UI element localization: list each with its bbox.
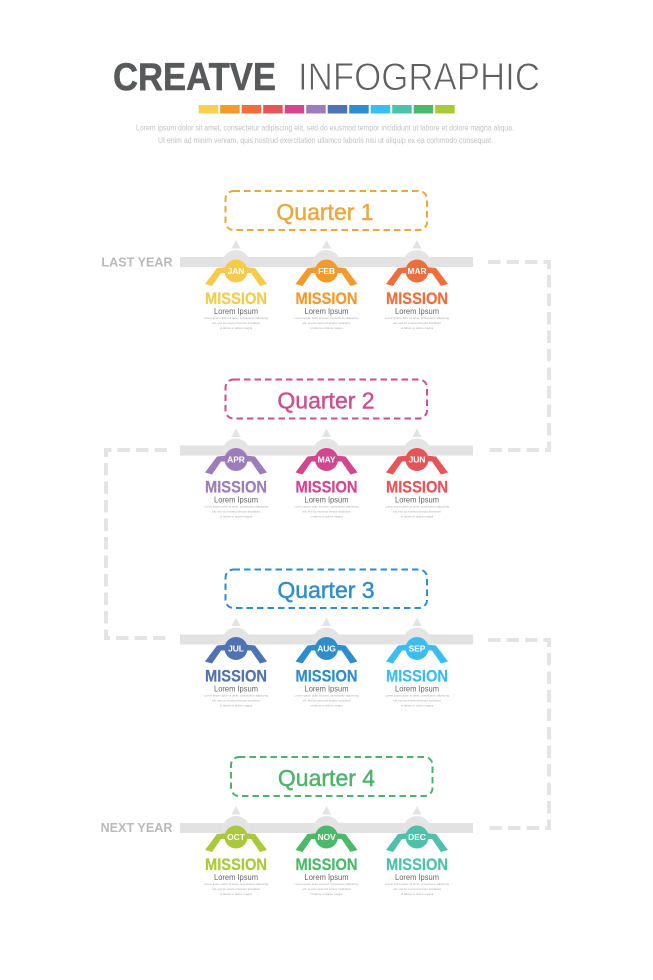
label: last year: LAST YEAR <box>101 256 173 270</box>
month: july: Lorem Ipsum <box>214 684 258 694</box>
intro text: Ut enim ad minim veniam, quis nostrud exercitation ullamco laboris nisi ut aliquip ex ea commodo consequat. <box>158 136 493 145</box>
timeline bar <box>180 634 473 644</box>
month: november: ut labore et dolore magna <box>310 892 343 896</box>
month: september: Lorem ipsum dolor sit amet, consectetur adipiscing <box>385 694 449 698</box>
month: february: elit, sed do eiusmod tempor incididunt <box>303 321 351 325</box>
month: december: MISSION <box>386 856 448 874</box>
panel: quarter 3 <box>180 570 473 708</box>
quarter 3 heading <box>226 570 427 608</box>
month: july: JUL <box>228 644 244 654</box>
month: december: ut labore et dolore magna <box>401 892 434 896</box>
month: january: Lorem ipsum dolor sit amet, consectetur adipiscing <box>204 316 268 320</box>
title: INFOGRAPHIC <box>298 56 540 99</box>
title: CREATVE <box>113 56 276 99</box>
month: november: Lorem ipsum dolor sit amet, consectetur adipiscing <box>294 882 359 886</box>
month: may: MAY <box>318 454 336 464</box>
month: may <box>294 428 359 518</box>
month: april: MISSION <box>205 478 267 496</box>
month: march: Lorem ipsum dolor sit amet, consectetur adipiscing <box>385 316 449 320</box>
quarter 2 heading: Quarter 2 <box>277 388 375 414</box>
month: august: elit, sed do eiusmod tempor incididunt <box>303 698 351 702</box>
month: october: elit, sed do eiusmod tempor incididunt <box>212 887 260 891</box>
month: september: MISSION <box>386 667 448 685</box>
month: october: OCT <box>227 832 246 842</box>
month: january: MISSION <box>205 290 267 308</box>
month: june: Lorem ipsum dolor sit amet, consectetur adipiscing <box>385 504 449 508</box>
month: october: ut labore et dolore magna <box>220 892 253 896</box>
month: april <box>204 428 268 518</box>
intro text: Lorem ipsum dolor sit amet, consectetur adipiscing elit, sed do eiusmod tempor incididunt ut labore et dolore magna aliqua. <box>136 124 514 132</box>
quarter 4 heading <box>231 757 432 796</box>
title <box>113 56 540 99</box>
month: september <box>385 618 449 708</box>
timeline bar <box>180 823 473 833</box>
month: may: Lorem Ipsum <box>304 494 348 504</box>
month: june: JUN <box>409 454 425 464</box>
month: april: Lorem Ipsum <box>214 494 258 504</box>
month: february <box>294 240 359 330</box>
month: july: Lorem ipsum dolor sit amet, consectetur adipiscing <box>204 694 268 698</box>
connector: left, quarter 2 to quarter 3 <box>106 450 167 638</box>
panel: quarter 1 <box>180 191 473 330</box>
month: november: Lorem Ipsum <box>304 872 348 882</box>
quarter 1 heading <box>226 191 427 230</box>
month: september: ut labore et dolore magna <box>401 704 434 708</box>
month: june: MISSION <box>386 478 448 496</box>
month: may: elit, sed do eiusmod tempor incididunt <box>303 510 351 514</box>
month: january: elit, sed do eiusmod tempor incididunt <box>212 321 260 325</box>
intro text <box>136 124 514 145</box>
month: april: Lorem ipsum dolor sit amet, consectetur adipiscing <box>204 504 268 508</box>
month: march: MAR <box>407 266 427 276</box>
month: march: Lorem Ipsum <box>395 306 439 316</box>
quarter 1 heading: Quarter 1 <box>276 199 374 225</box>
month: may: MISSION <box>296 478 358 496</box>
month: may: ut labore et dolore magna <box>310 514 343 518</box>
month: june <box>385 428 449 518</box>
month: february: Lorem ipsum dolor sit amet, consectetur adipiscing <box>294 316 359 320</box>
month: september: Lorem Ipsum <box>395 684 439 694</box>
month: august <box>294 618 359 708</box>
month: april: ut labore et dolore magna <box>220 514 253 518</box>
month: june: ut labore et dolore magna <box>401 514 434 518</box>
month: january: JAN <box>228 266 244 276</box>
month: july <box>204 618 268 708</box>
month: january: ut labore et dolore magna <box>220 326 253 330</box>
color strip <box>199 105 455 114</box>
month: december <box>385 806 449 896</box>
connector: right, last year to quarter 2 <box>488 262 549 450</box>
month: october: Lorem Ipsum <box>214 872 258 882</box>
month: march <box>385 240 449 330</box>
month: april: APR <box>227 454 245 464</box>
month: may: Lorem ipsum dolor sit amet, consectetur adipiscing <box>294 504 359 508</box>
panel: quarter 4 <box>180 757 473 896</box>
month: march: MISSION <box>386 290 448 308</box>
month: october: MISSION <box>205 856 267 874</box>
month: october <box>204 806 268 896</box>
connector: right, quarter 3 to next year <box>488 640 549 828</box>
month: march: elit, sed do eiusmod tempor incididunt <box>393 321 441 325</box>
month: february: ut labore et dolore magna <box>310 326 343 330</box>
month: july: ut labore et dolore magna <box>220 704 253 708</box>
month: january: Lorem Ipsum <box>214 306 258 316</box>
month: december: DEC <box>408 832 426 842</box>
month: september: elit, sed do eiusmod tempor incididunt <box>393 698 441 702</box>
label: next year: NEXT YEAR <box>101 821 172 835</box>
month: march: ut labore et dolore magna <box>401 326 434 330</box>
quarter 3 heading: Quarter 3 <box>277 577 375 603</box>
month: december: Lorem Ipsum <box>395 872 439 882</box>
month: november: NOV <box>317 832 336 842</box>
quarter 4 heading: Quarter 4 <box>278 765 375 791</box>
month: october: Lorem ipsum dolor sit amet, consectetur adipiscing <box>204 882 268 886</box>
month: september: SEP <box>409 644 426 654</box>
month: april: elit, sed do eiusmod tempor incididunt <box>212 510 260 514</box>
month: june: elit, sed do eiusmod tempor incididunt <box>393 510 441 514</box>
month: november: MISSION <box>296 856 358 874</box>
month: november: elit, sed do eiusmod tempor incididunt <box>303 887 351 891</box>
month: november <box>294 806 359 896</box>
month: february: Lorem Ipsum <box>304 306 348 316</box>
timeline bar <box>180 446 473 456</box>
month: december: Lorem ipsum dolor sit amet, consectetur adipiscing <box>385 882 449 886</box>
month: january <box>204 240 268 330</box>
quarter 2 heading <box>226 380 427 418</box>
month: august: MISSION <box>296 667 358 685</box>
month: august: AUG <box>317 644 336 654</box>
month: july: MISSION <box>205 667 267 685</box>
month: august: Lorem Ipsum <box>304 684 348 694</box>
timeline bar <box>180 257 473 267</box>
month: february: MISSION <box>296 290 358 308</box>
month: june: Lorem Ipsum <box>395 494 439 504</box>
month: august: Lorem ipsum dolor sit amet, consectetur adipiscing <box>294 694 359 698</box>
month: july: elit, sed do eiusmod tempor incididunt <box>212 698 260 702</box>
month: december: elit, sed do eiusmod tempor incididunt <box>393 887 441 891</box>
panel: quarter 2 <box>180 380 473 518</box>
month: february: FEB <box>318 266 335 276</box>
month: august: ut labore et dolore magna <box>310 704 343 708</box>
